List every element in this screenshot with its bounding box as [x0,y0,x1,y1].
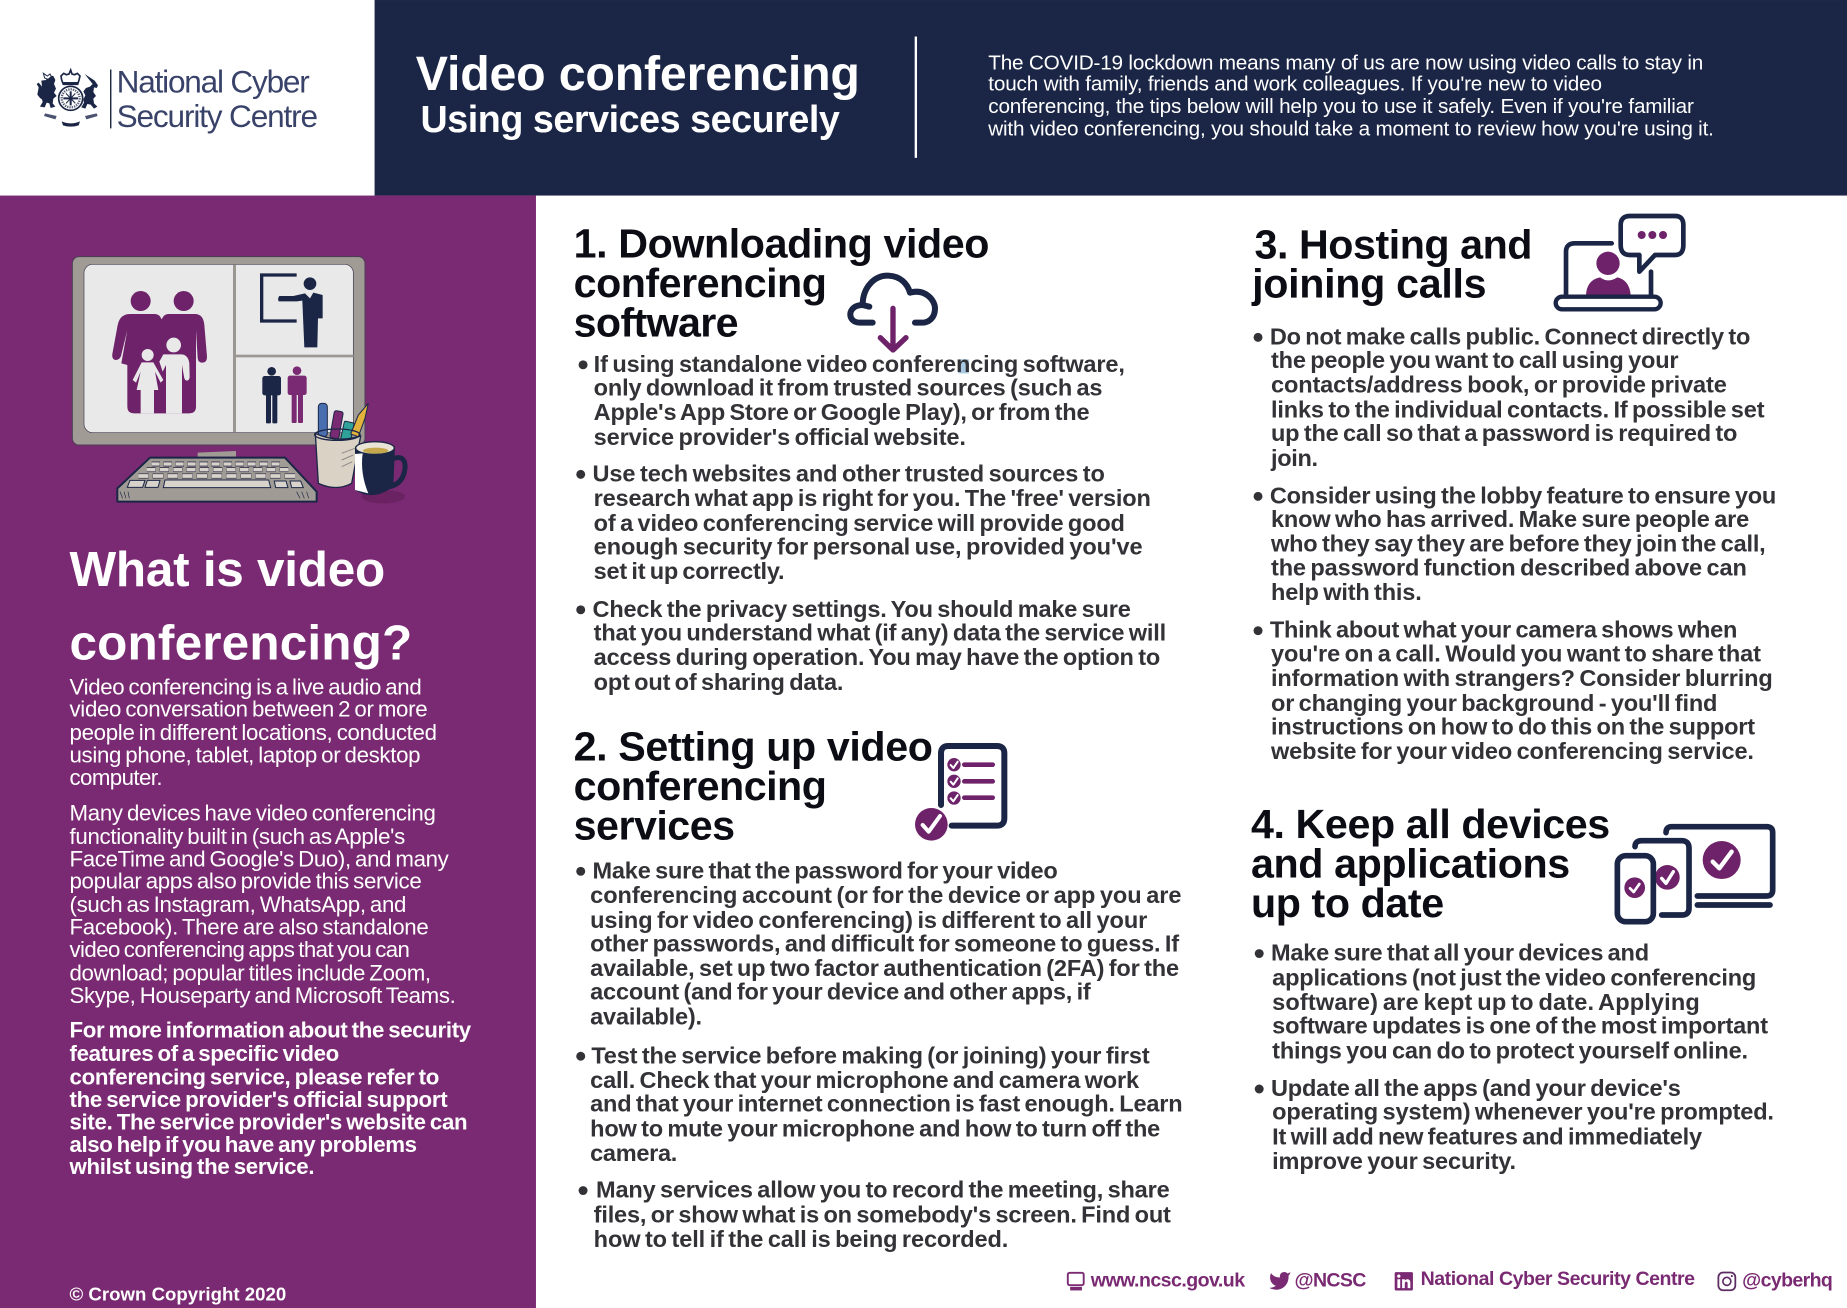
text: devices and apps: Skype, Houseparty and Microsoft Teams. [69,983,456,1008]
bullets 2: how to mute your microphone and how to turn off the [590,1115,1160,1141]
bullets 2: other passwords, and difficult for someone to guess. If [590,930,1179,956]
heading 2: conferencing [574,763,827,809]
logo wordmark [117,63,318,134]
text: definition [69,674,437,790]
bullets 3: up the call so that a password is required to [1271,420,1737,446]
logo wordmark: National Cyber [117,63,310,99]
text: more information: also help if you have any problems [69,1132,417,1157]
illustration: desktop computer with video call [72,257,405,503]
section 4: keep up to date [1251,801,1774,1174]
text: devices and apps: (such as Instagram, WhatsApp, and [69,892,406,917]
heading 4: and applications [1251,841,1570,887]
text: definition: Video conferencing is a live audio and [69,674,422,699]
intro text: The COVID-19 lockdown means many of us are now using video calls to stay in [988,52,1703,75]
bullets 1: enough security for personal use, provided you've [594,533,1143,559]
text: devices and apps: popular apps also provide this service [69,869,422,894]
twitter link: @NCSC [1295,1269,1366,1291]
text: more information: site. The service provider's website can [69,1109,468,1134]
text: devices and apps: Facebook). There are also standalone [69,915,429,940]
text: devices and apps: download; popular titles include Zoom, [69,961,431,986]
heading 3: 3. Hosting and [1254,222,1532,268]
text selection highlight [958,359,969,373]
bullets 1: research what app is right for you. The 'free' version [594,485,1151,511]
family [112,291,207,413]
heading: what is video conferencing: What is video [69,542,385,597]
section 1: downloading [574,220,1166,695]
icon: devices with check marks [1617,827,1773,922]
bullets 2: files, or show what is on somebody's screen. Find out [594,1201,1171,1227]
bullets 1: Check the privacy settings. You should make sure [593,596,1131,622]
bullets 3: Do not make calls public. Connect directly to [1270,323,1750,349]
intro text: conferencing, the tips below will help you to use it safely. Even if you're familiar [988,95,1694,118]
intro text [987,52,1714,140]
bullets 4: operating system) whenever you're prompted. [1272,1099,1774,1125]
bullets 4: Update all the apps (and your device's [1271,1075,1681,1101]
bullets 1: set it up correctly. [594,558,785,584]
bullets 4: It will add new features and immediately [1272,1123,1702,1149]
text: more information: conferencing service, please refer to [69,1065,439,1090]
intro text: with video conferencing, you should take a moment to review how you're using it. [987,117,1714,140]
bullets 2: conferencing account (or for the device or app you are [590,882,1181,908]
icon: checklist [915,746,1004,841]
text: devices and apps: video conferencing apps that you can [69,937,410,962]
website link: www.ncsc.gov.uk [1090,1269,1245,1291]
icon: royal crest [37,70,98,127]
text: devices and apps: functionality built in (such as Apple's [69,824,405,849]
icon: laptop with speech bubble [1556,216,1683,309]
bullets 2: account (and for your device and other apps, if [590,979,1091,1005]
bullets 4 [1255,940,1774,1174]
bullets 4: software) are kept up to date. Applying [1272,989,1700,1015]
text: more information: the service provider's official support [69,1087,448,1112]
divider line in logo [110,70,111,128]
text: more information: features of a specific video [69,1041,339,1066]
text: devices and apps: FaceTime and Google's Duo), and many [69,846,450,871]
text: devices and apps: Many devices have video conferencing [69,800,436,825]
bullets 4: applications (not just the video conferencing [1272,964,1756,990]
bullets 1: service provider's official website. [594,424,966,450]
bullets 1: only download it from trusted sources (such as [594,374,1103,400]
bullets 2: and that your internet connection is fast enough. Learn [590,1091,1183,1117]
bullets 1: of a video conferencing service will provide good [594,510,1125,536]
text: more information: For more information about the security [69,1018,472,1043]
instagram link: @cyberhq [1742,1269,1833,1291]
bullets 3: the people you want to call using your [1271,347,1679,373]
heading 4 [1251,801,1610,926]
bullets 3: who they say they are before they join the call, [1270,531,1766,557]
text: definition: video conversation between 2 or more [69,697,428,722]
intro text: touch with family, friends and work colleagues. If you're new to video [988,73,1602,96]
copyright: © Crown Copyright 2020 [69,1283,286,1304]
logo wordmark: Security Centre [117,98,318,134]
bullets 2: available). [590,1003,702,1029]
heading 2: services [574,802,735,848]
bullets 3: information with strangers? Consider blurring [1271,665,1773,691]
heading: what is video conferencing: conferencing? [69,616,412,671]
linkedin link: National Cyber Security Centre [1421,1268,1695,1290]
bullets 2: using for video conferencing) is different to all your [590,907,1147,933]
panel: what is video conferencing [0,196,536,1308]
title [416,47,860,140]
bullets 3: instructions on how to do this on the support [1271,713,1755,739]
heading 2 [574,723,933,848]
heading 3: joining calls [1251,260,1487,306]
bullets 1: that you understand what (if any) data the service will [594,619,1166,645]
bullets 1 [576,351,1166,695]
heading: what is video conferencing [69,542,412,671]
coffee mug [355,442,405,495]
bullets 3: help with this. [1271,579,1422,605]
bullets 1: Apple's App Store or Google Play), or from the [594,399,1090,425]
heading 1 [574,220,989,345]
bullets 2: call. Check that your microphone and camera work [590,1067,1140,1093]
presenter [262,275,323,347]
icon: cloud download [850,276,935,350]
heading 1: conferencing [574,260,827,306]
bullets 2: camera. [590,1140,677,1166]
bullets 3: Consider using the lobby feature to ensure you [1270,482,1776,508]
bullets 4: Make sure that all your devices and [1271,940,1649,966]
heading 1: software [574,299,739,345]
heading 4: up to date [1251,880,1444,926]
bullets 3: contacts/address book, or provide private [1271,372,1727,398]
bullets 3: join. [1270,445,1318,471]
section 3: hosting [1251,216,1776,764]
text: definition: using phone, tablet, laptop or desktop [69,743,421,768]
bullets 2 [576,857,1183,1252]
text: definition: computer. [69,765,163,790]
bullets 1: access during operation. You may have the option to [594,644,1160,670]
bullets 4: things you can do to protect yourself online. [1272,1037,1748,1063]
bullets 3: you're on a call. Would you want to share that [1271,640,1761,666]
text: devices and apps [69,800,456,1008]
bullets 3: or changing your background - you'll find [1271,690,1717,716]
text: more information: whilst using the service. [68,1154,315,1179]
bullets 3: website for your video conferencing service. [1270,738,1754,764]
heading 3 [1251,222,1532,306]
footer: contact links [1068,1268,1833,1291]
bullets 2: Many services allow you to record the meeting, share [596,1177,1170,1203]
two people [262,366,307,423]
title: Using services securely [421,98,840,140]
heading 4: 4. Keep all devices [1251,801,1610,847]
bullets 2: Make sure that the password for your video [593,857,1058,883]
bullets 3: know who has arrived. Make sure people are [1271,506,1749,532]
bullets 4: software updates is one of the most important [1272,1013,1768,1039]
bullets 1: If using standalone video conferencing software, [594,351,1125,377]
bullets 3: Think about what your camera shows when [1270,617,1737,643]
header: navy banner [375,0,1847,196]
title: Video conferencing [416,47,860,101]
bullets 3: links to the individual contacts. If possible set [1271,396,1765,422]
bullets 2: available, set up two factor authentication (2FA) for the [590,955,1179,981]
bullets 2: how to tell if the call is being recorded. [594,1226,1008,1252]
bullets 3: the password function described above can [1271,554,1747,580]
keyboard [117,458,317,502]
bullets 3 [1254,323,1776,764]
header: logo block [37,63,318,134]
text: more information [68,1018,472,1179]
pens in cup [315,403,368,488]
heading 2: 2. Setting up video [574,723,933,769]
bullets 2: Test the service before making (or joining) your first [591,1042,1150,1068]
heading 1: 1. Downloading video [574,220,989,266]
text: definition: people in different locations, conducted [69,720,437,745]
bullets 1: opt out of sharing data. [594,669,843,695]
section 2: setting up [574,723,1183,1252]
bullets 1: Use tech websites and other trusted sources to [593,460,1105,486]
bullets 4: improve your security. [1272,1148,1516,1174]
